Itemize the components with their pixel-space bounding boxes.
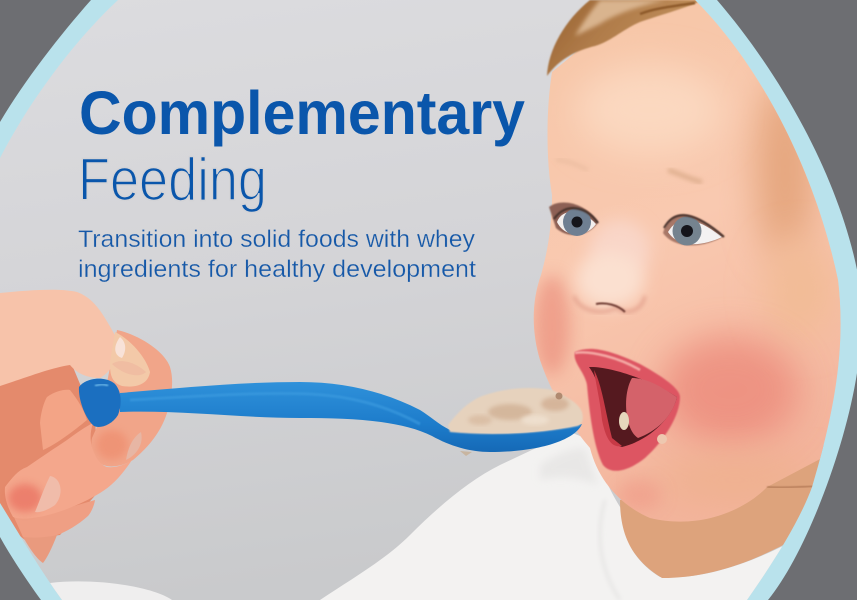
finger nails <box>126 432 142 460</box>
feeding hand <box>0 290 172 563</box>
left eye <box>549 202 598 236</box>
subtitle line 2: ingredients for healthy development <box>78 256 476 283</box>
fingertip redness <box>96 430 128 460</box>
spoon <box>79 379 582 452</box>
right eye <box>663 214 724 246</box>
heading: Complementary: Complementary <box>79 79 525 147</box>
pinky finger <box>22 535 57 563</box>
baby face <box>534 0 857 522</box>
heading: Feeding: Feeding <box>78 146 267 213</box>
ring finger <box>13 500 95 538</box>
tongue <box>626 378 677 438</box>
spoon handle and bowl <box>120 382 582 452</box>
baby cereal on spoon <box>448 388 583 456</box>
palm and back of hand <box>0 360 100 540</box>
front finger <box>5 423 132 519</box>
subtitle line 1: Transition into solid foods with whey <box>78 226 476 253</box>
forehead shading <box>755 80 815 260</box>
knuckle finger <box>0 290 118 386</box>
thumb nail <box>110 332 150 387</box>
jaw crease <box>767 486 814 487</box>
rear finger <box>91 330 172 466</box>
tooth <box>619 412 629 430</box>
shirt <box>50 432 785 600</box>
spoon highlight <box>130 393 420 424</box>
hair <box>547 0 702 76</box>
subtitle <box>78 226 476 283</box>
upper lip highlight <box>575 352 640 370</box>
neck <box>620 446 824 578</box>
nose <box>574 252 645 312</box>
cheek blush <box>660 335 800 445</box>
eyebrows <box>667 168 703 184</box>
mouth <box>575 349 680 471</box>
title <box>78 79 525 213</box>
middle finger <box>40 390 87 450</box>
spoon handle end <box>79 379 121 427</box>
